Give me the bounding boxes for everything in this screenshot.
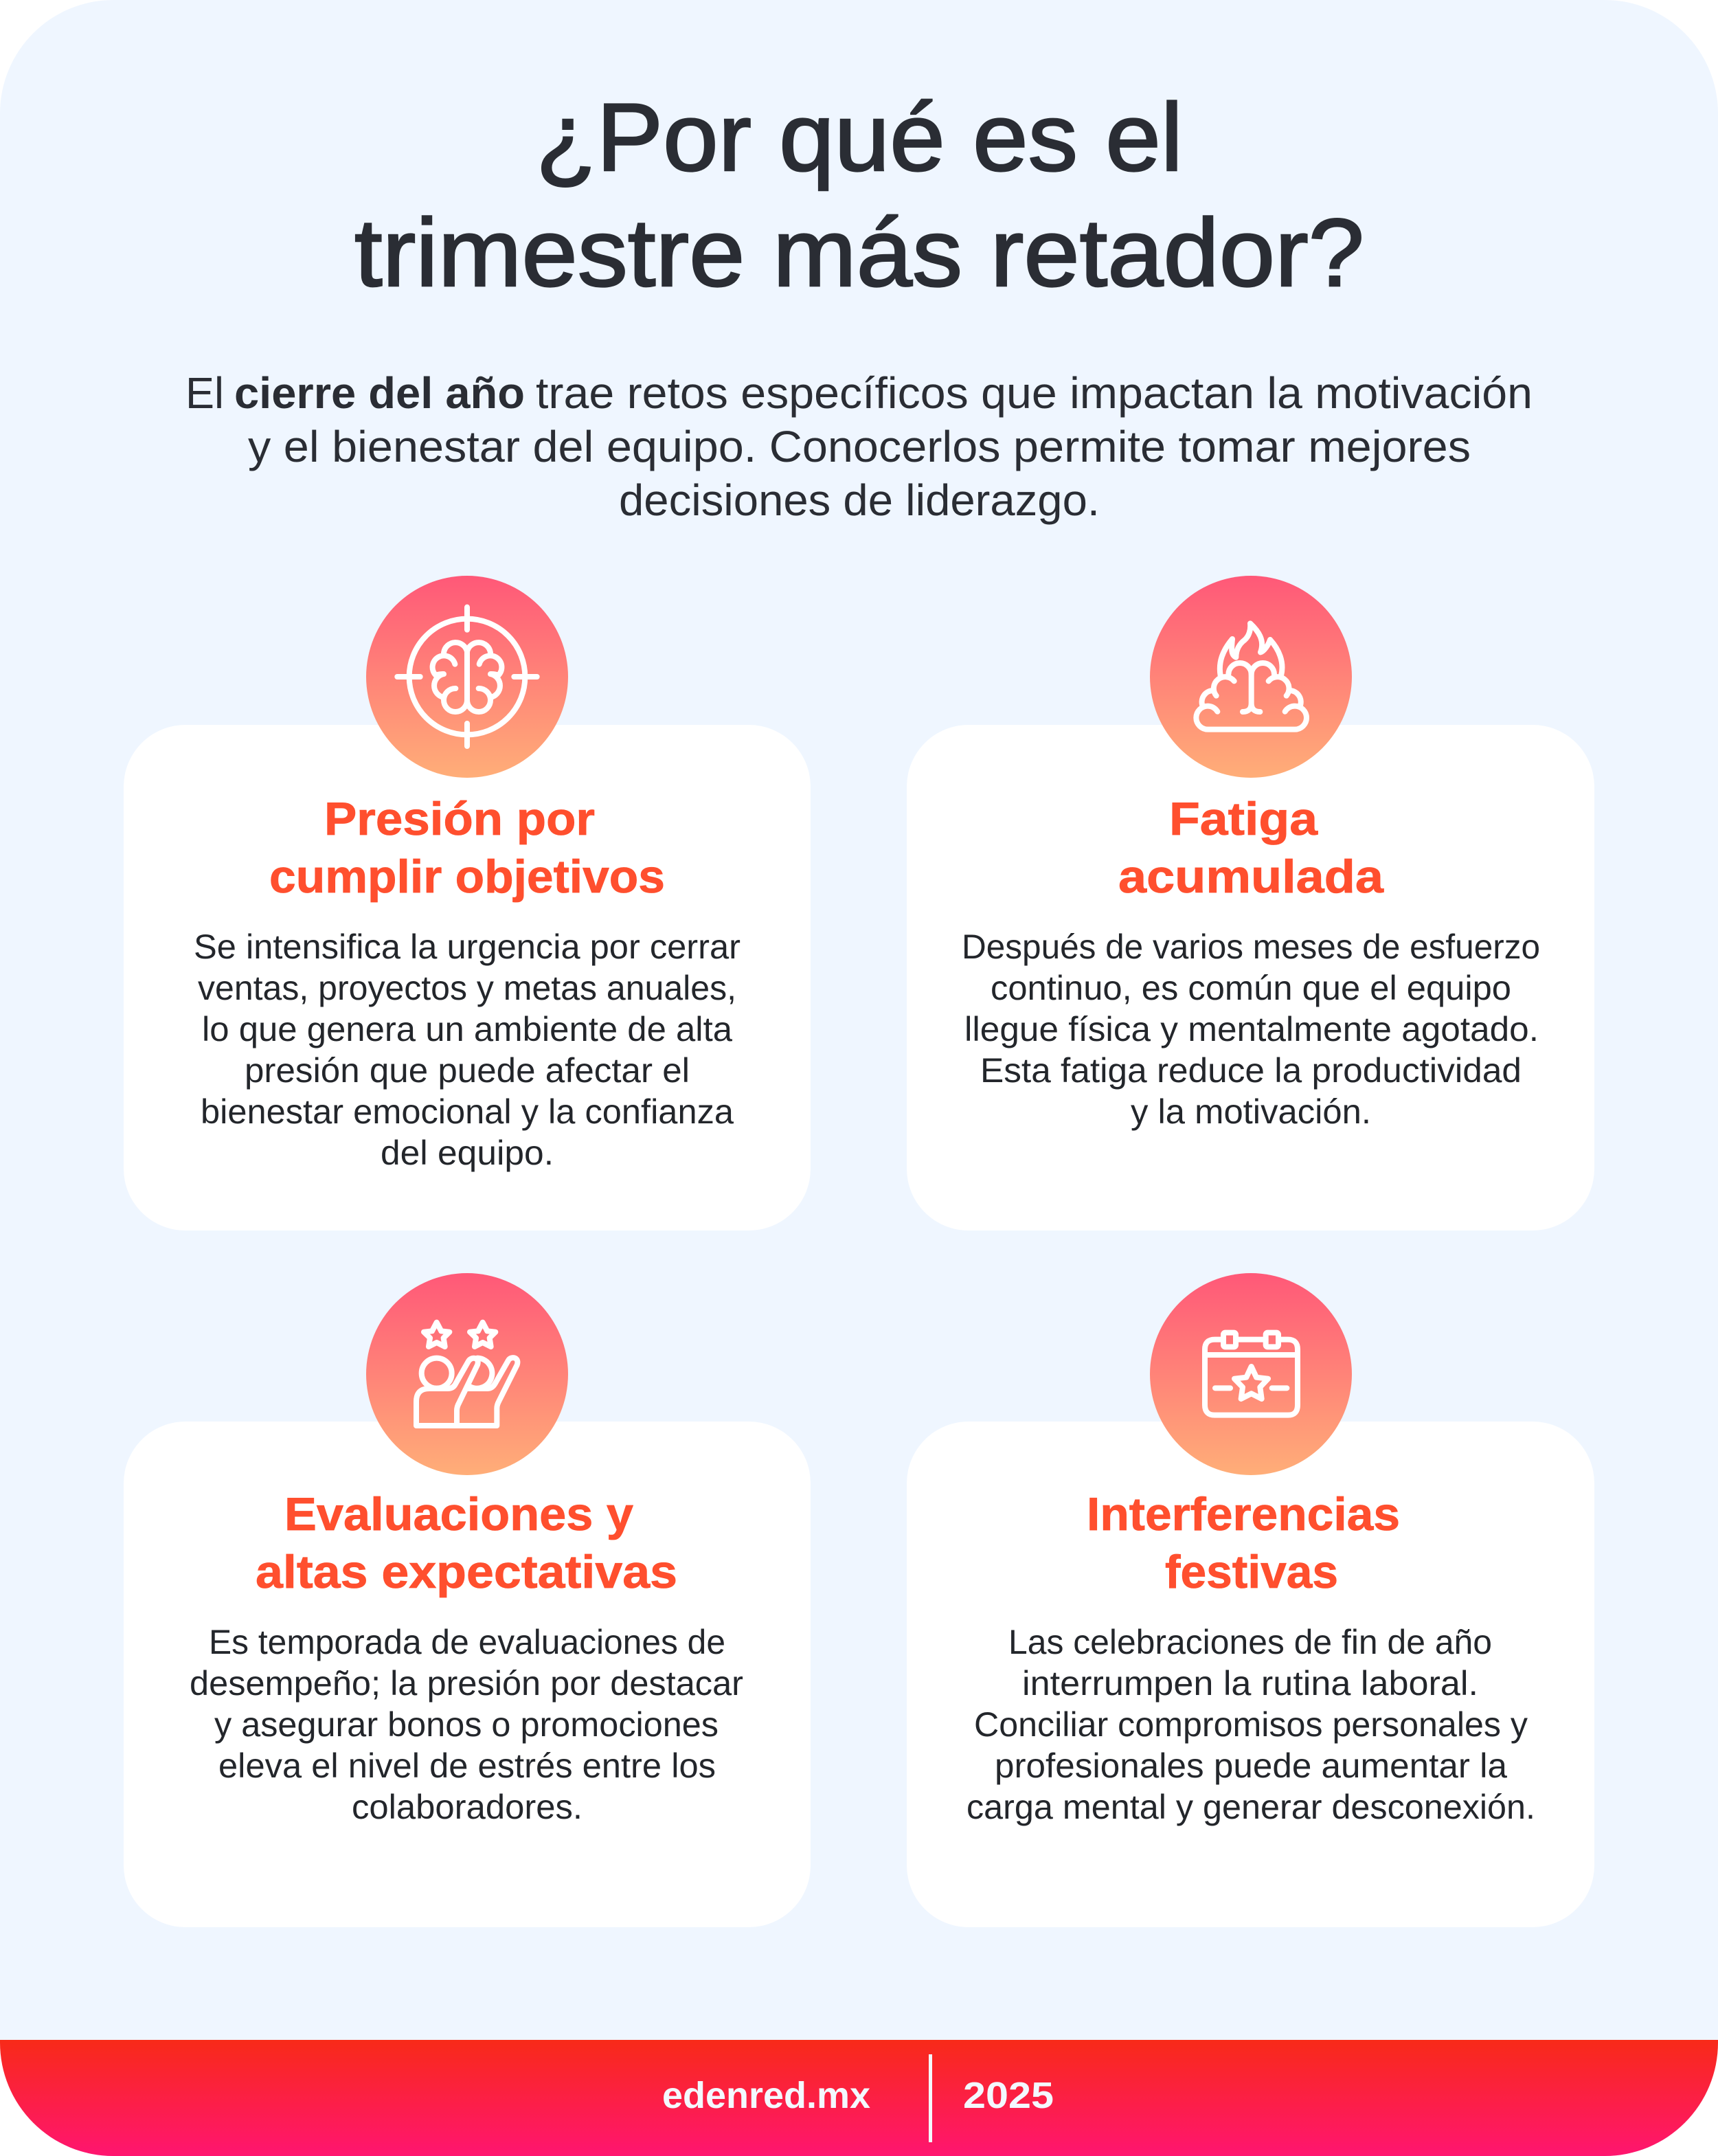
body text: del equipo. bbox=[381, 1134, 554, 1172]
body text bbox=[962, 928, 1540, 1131]
heading: Evaluaciones y bbox=[284, 1488, 633, 1540]
body text: carga mental y generar desconexión. bbox=[967, 1788, 1535, 1826]
heading: Presión por bbox=[324, 793, 595, 845]
body text: Se intensifica la urgencia por cerrar bbox=[194, 928, 741, 966]
body text: desempeño; la presión por destacar bbox=[190, 1664, 743, 1703]
body text: llegue física y mentalmente agotado. bbox=[964, 1010, 1539, 1048]
intro text: decisiones de liderazgo. bbox=[619, 475, 1100, 525]
panel: interferencias festivas bbox=[907, 1273, 1594, 1927]
heading: acumulada bbox=[1118, 851, 1384, 903]
footer band bbox=[0, 2040, 1718, 2156]
heading bbox=[1087, 1488, 1400, 1598]
body text: Esta fatiga reduce la productividad bbox=[980, 1051, 1522, 1090]
heading: festivas bbox=[1165, 1546, 1338, 1598]
title: trimestre más retador? bbox=[354, 199, 1364, 306]
body text: Después de varios meses de esfuerzo bbox=[962, 928, 1540, 966]
body text: continuo, es común que el equipo bbox=[991, 969, 1511, 1007]
body text: lo que genera un ambiente de alta bbox=[202, 1010, 732, 1048]
footer divider bbox=[929, 2054, 932, 2142]
heading bbox=[269, 793, 665, 903]
heading: Interferencias bbox=[1087, 1488, 1400, 1540]
intro text: cierre del año bbox=[234, 368, 525, 418]
body text bbox=[194, 928, 741, 1172]
body text: profesionales puede aumentar la bbox=[995, 1747, 1507, 1785]
body text: Las celebraciones de fin de año bbox=[1008, 1623, 1492, 1661]
heading bbox=[1118, 793, 1384, 903]
intro text: trae retos específicos que impactan la motivación bbox=[536, 368, 1533, 418]
body text: Es temporada de evaluaciones de bbox=[209, 1623, 725, 1661]
icon: calendar with star bbox=[1150, 1273, 1352, 1475]
intro text: El bbox=[185, 368, 224, 418]
heading: Fatiga bbox=[1169, 793, 1318, 845]
heading: altas expectativas bbox=[256, 1546, 677, 1598]
body text: y la motivación. bbox=[1131, 1092, 1371, 1131]
title bbox=[354, 83, 1364, 306]
body text: ventas, proyectos y metas anuales, bbox=[198, 969, 736, 1007]
icon: people with stars bbox=[366, 1273, 568, 1475]
icon: brain on fire bbox=[1150, 576, 1352, 778]
footer year: 2025 bbox=[963, 2075, 1054, 2116]
heading: cumplir objetivos bbox=[269, 851, 665, 903]
body text: Conciliar compromisos personales y bbox=[974, 1705, 1528, 1744]
body text: presión que puede afectar el bbox=[245, 1051, 690, 1090]
icon: brain target bbox=[366, 576, 568, 778]
body text: interrumpen la rutina laboral. bbox=[1022, 1664, 1478, 1703]
heading bbox=[256, 1488, 677, 1598]
body text bbox=[967, 1623, 1535, 1826]
body text: eleva el nivel de estrés entre los bbox=[218, 1747, 716, 1785]
intro text: y el bienestar del equipo. Conocerlos permite tomar mejores bbox=[248, 422, 1471, 471]
title: ¿Por qué es el bbox=[536, 83, 1183, 191]
body text: colaboradores. bbox=[352, 1788, 583, 1826]
body text: y asegurar bonos o promociones bbox=[214, 1705, 719, 1744]
body text bbox=[190, 1623, 743, 1826]
footer website: edenred.mx bbox=[662, 2075, 870, 2116]
intro text bbox=[185, 368, 1533, 525]
panel: evaluaciones y altas expectativas bbox=[124, 1273, 811, 1927]
body text: bienestar emocional y la confianza bbox=[201, 1092, 734, 1131]
panel: fatiga acumulada bbox=[907, 576, 1594, 1231]
panel: presión por cumplir objetivos bbox=[124, 576, 811, 1231]
